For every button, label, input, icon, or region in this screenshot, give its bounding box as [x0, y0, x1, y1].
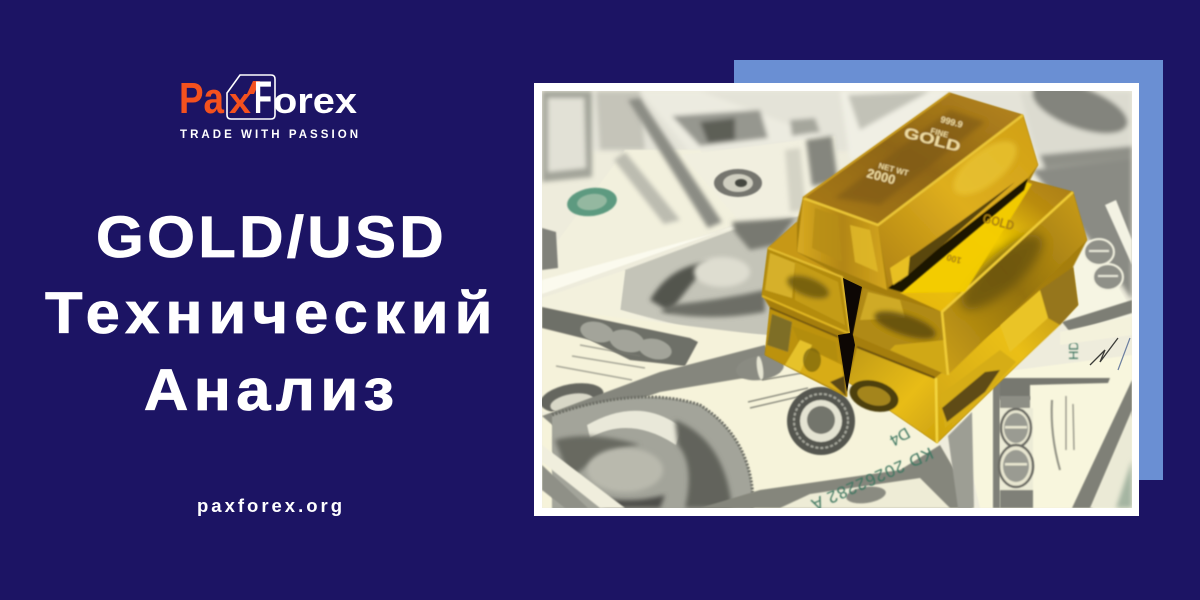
- middle-right bar: [853, 180, 1087, 375]
- centre black gap: [838, 278, 862, 392]
- top bar: GOLD: [981, 210, 1016, 233]
- diagonal band of upper-left note: [628, 98, 722, 228]
- logo wordmark: F: [254, 72, 272, 123]
- infographic canvas: [45, 60, 1163, 516]
- top bar: [797, 93, 1038, 292]
- gold bars stack: [762, 93, 1087, 443]
- photo: gold bars on dollar banknotes: [538, 72, 1134, 514]
- middle portrait banknote: [620, 216, 800, 335]
- logo wordmark: Pa: [179, 74, 224, 123]
- title: [45, 205, 492, 423]
- bar engravings: FINE: [929, 126, 950, 140]
- blue offset panel: [734, 60, 1163, 480]
- website url: paxforex.org: [197, 495, 342, 516]
- green seal: [566, 186, 618, 218]
- bar engravings: NET WT: [877, 161, 910, 178]
- blurred upper notes: [542, 72, 1134, 300]
- small grey seal: [714, 169, 762, 197]
- lower-left corner strip: [551, 452, 626, 508]
- lower-right banknote: [960, 355, 1132, 508]
- upper-middle banknote: [739, 136, 836, 151]
- portrait medallion: [552, 397, 753, 510]
- treasury seal: [787, 387, 855, 455]
- bar engravings: GOLD: [902, 124, 963, 156]
- large foreground banknote: [543, 367, 938, 498]
- lower note edge: [700, 445, 972, 508]
- bar engravings: [865, 114, 964, 187]
- banknotes background: [538, 72, 1134, 514]
- banknotes background: HD: [1066, 341, 1081, 360]
- bottom-left bar: [765, 308, 847, 397]
- upper-left banknote: [624, 150, 683, 154]
- left edge strip: [542, 228, 558, 270]
- top bar: 100: [945, 252, 963, 266]
- stack underlay: [762, 93, 1087, 443]
- white photo frame: [534, 83, 1139, 516]
- logo wordmark: orex: [273, 80, 357, 121]
- serial number: D4: [886, 424, 912, 449]
- bottom-right bar: [846, 267, 1078, 443]
- logo tagline: TRADE WITH PASSION: [180, 129, 358, 141]
- title line 2: Технический: [45, 281, 492, 346]
- note with upside-down 100: [544, 324, 766, 411]
- logo wordmark: [179, 72, 357, 123]
- middle-left bar: [762, 222, 850, 334]
- logo frame: [227, 75, 275, 119]
- title line 3: Анализ: [144, 358, 394, 423]
- serial number: KD 20262282 A: [808, 443, 936, 514]
- foreground note text bands: [748, 372, 808, 408]
- title line 1: GOLD/USD: [96, 205, 444, 270]
- right edge banknote with 100: [1067, 240, 1132, 319]
- bar engravings: 2000: [865, 165, 897, 187]
- small text bands: [556, 345, 645, 380]
- bar engravings: 999.9: [939, 114, 964, 130]
- logo wordmark: x: [229, 80, 251, 121]
- logo: PaxForex: [179, 72, 358, 141]
